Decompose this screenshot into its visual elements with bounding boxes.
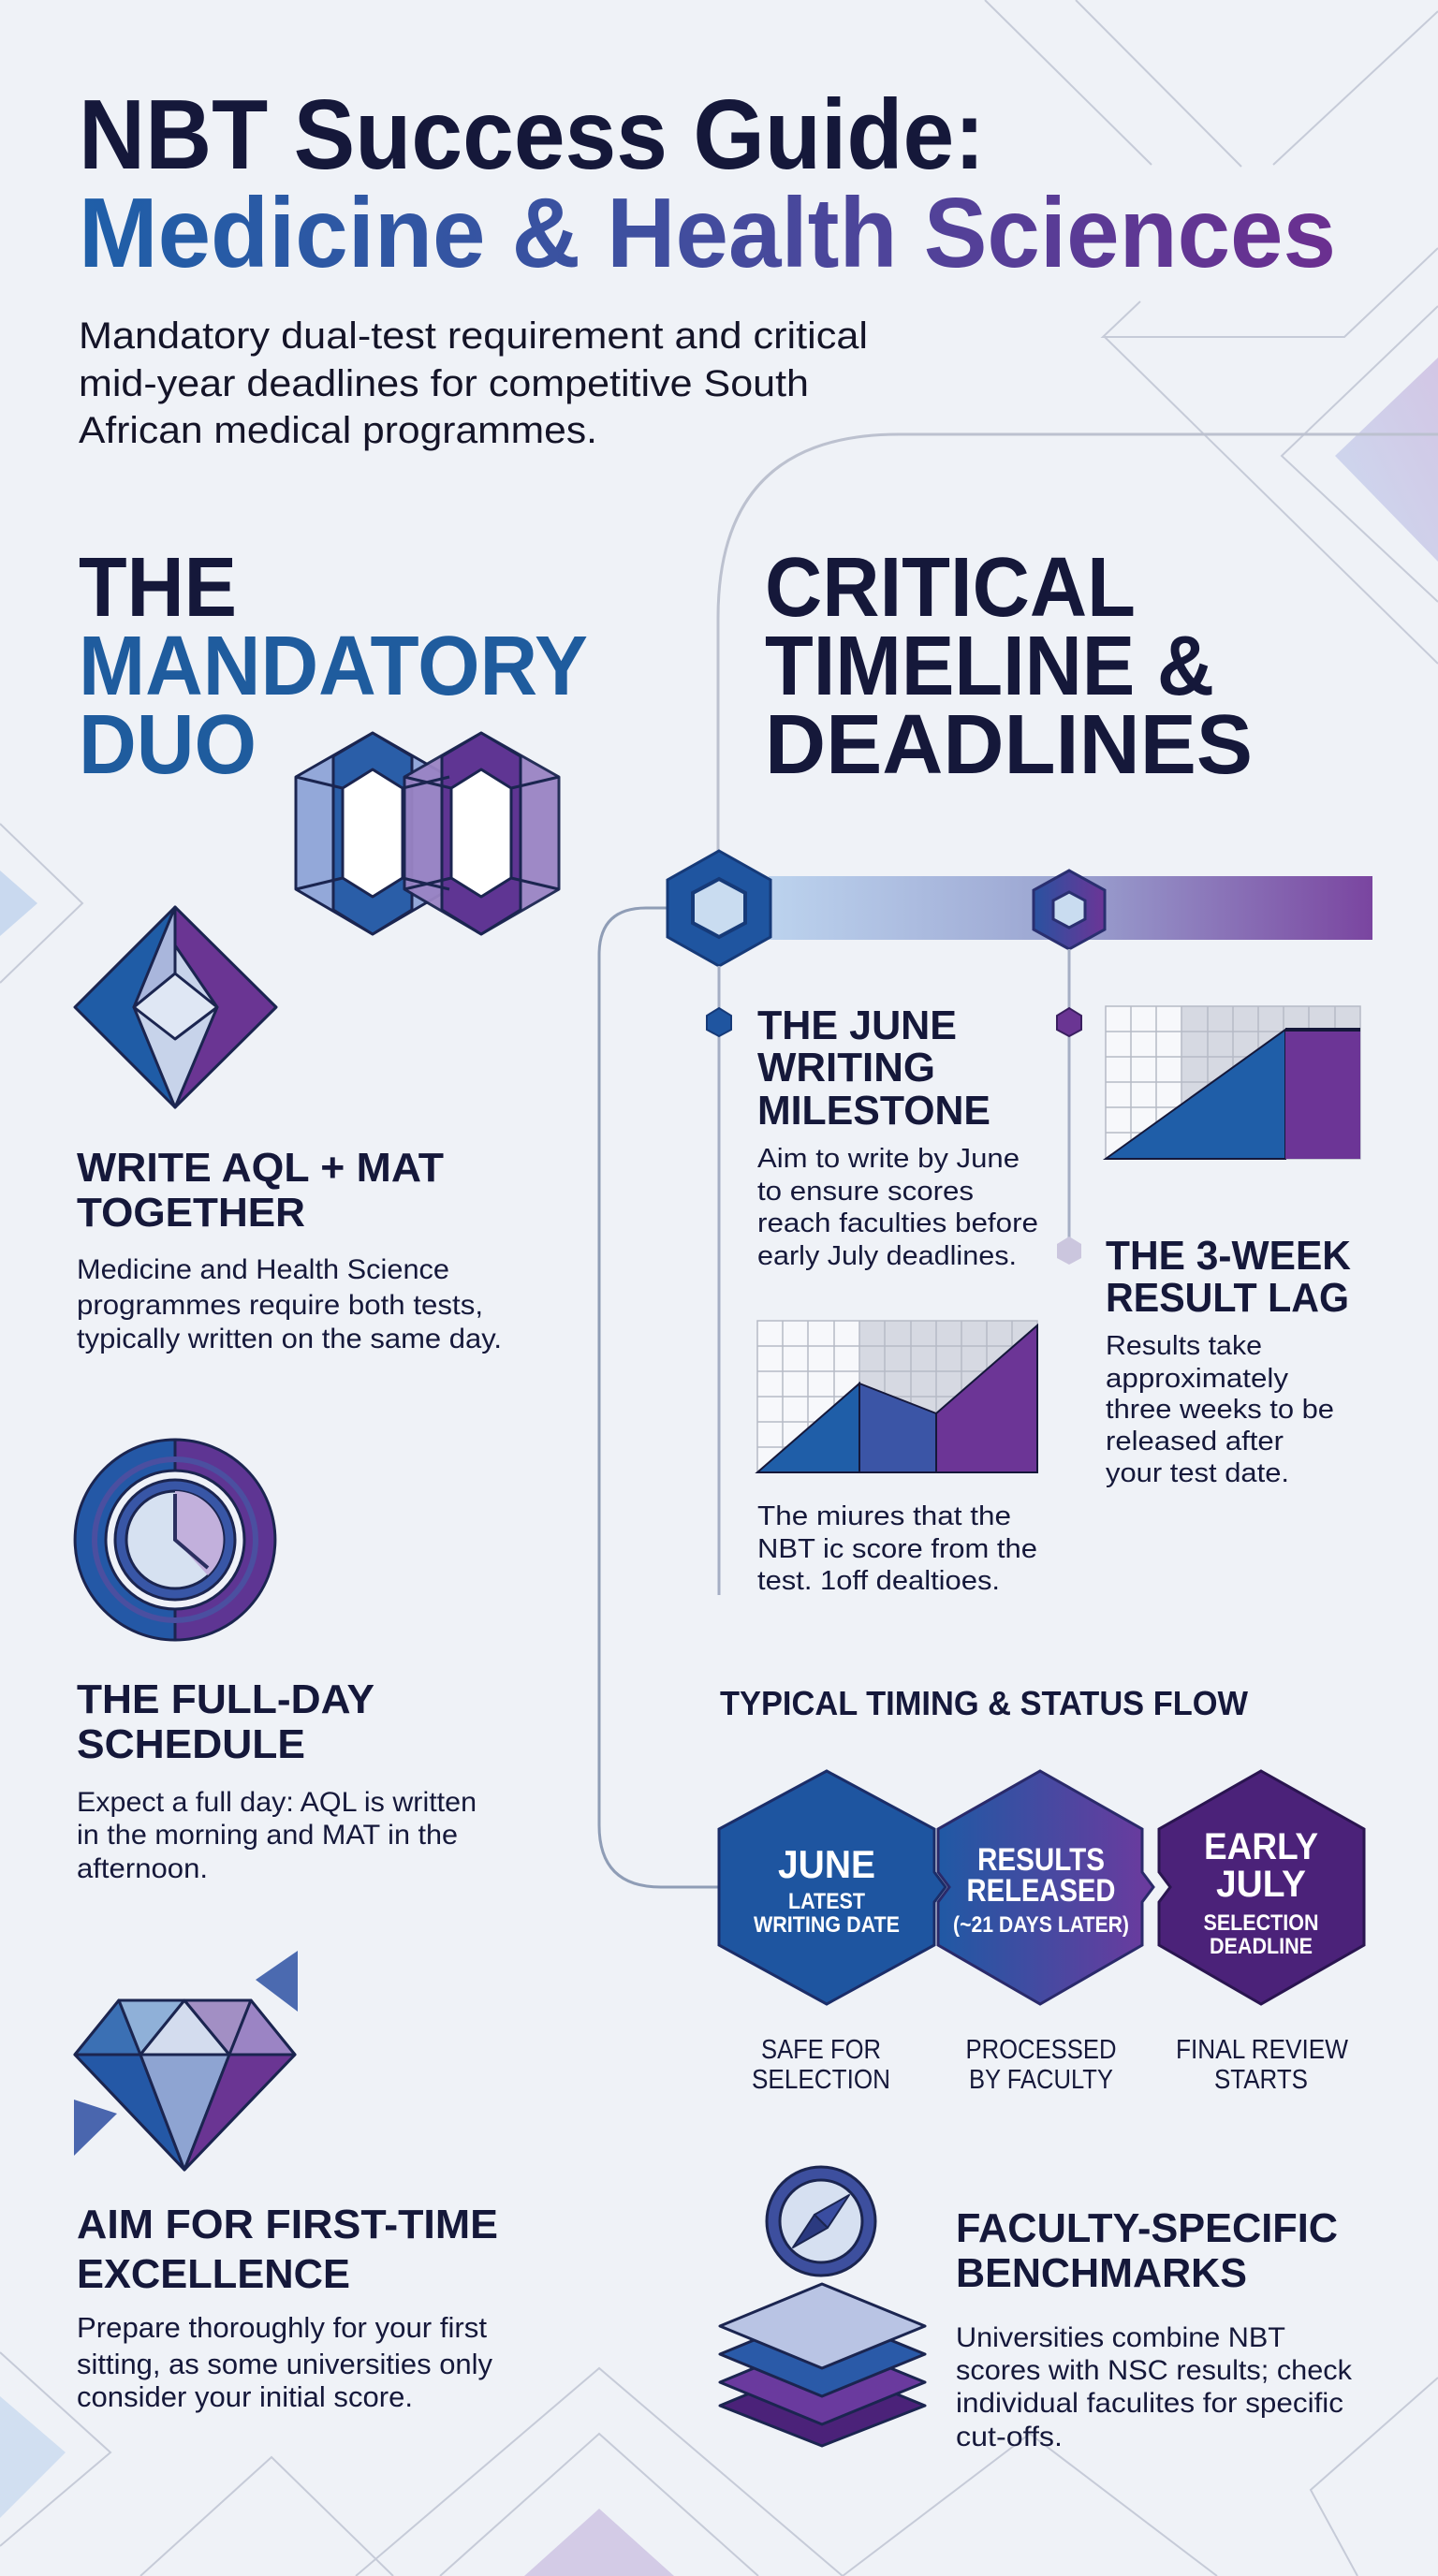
block: 3-week result lag: Results take	[1106, 1331, 1262, 1361]
heading: typical timing & status flow: TYPICAL TIMING & STATUS FLOW	[720, 1684, 1248, 1722]
block: 3-week result lag: released after	[1106, 1427, 1284, 1456]
panel outline: timeline section	[718, 434, 1438, 851]
icon: gem	[75, 2000, 295, 2170]
flow labels: STARTS	[1214, 2065, 1308, 2095]
heading: critical timeline & deadlines	[765, 541, 1253, 792]
block: faculty-specific benchmarks: individual faculites for specific	[956, 2388, 1343, 2419]
block: full-day schedule: afternoon.	[77, 1853, 208, 1884]
text block: chart caption: The miures that the	[757, 1501, 1011, 1531]
block: aim for first-time excellence: Prepare thoroughly for your first	[77, 2311, 487, 2344]
icon: interlocking hexagons duo	[296, 733, 559, 934]
heading: the mandatory duo: DUO	[79, 698, 257, 792]
heading: the mandatory duo: THE	[79, 541, 237, 635]
block: full-day schedule: Expect a full day: AQL is written	[77, 1787, 477, 1818]
block: write aql + mat: TOGETHER	[77, 1190, 305, 1236]
icon: timeline hex results	[1034, 871, 1105, 949]
heading: critical timeline & deadlines: DEADLINES	[765, 698, 1253, 792]
block: june writing milestone: early July deadlines.	[757, 1241, 1017, 1271]
hex: early july	[1159, 1771, 1364, 2004]
block: june writing milestone	[757, 1003, 1038, 1271]
text block: chart caption: NBT ic score from the	[757, 1534, 1037, 1564]
hex: june: LATEST	[788, 1889, 865, 1914]
hex: results released	[938, 1771, 1153, 2004]
block: faculty-specific benchmarks: cut-offs.	[956, 2422, 1063, 2452]
block: june writing milestone: MILESTONE	[757, 1088, 990, 1134]
title: Medicine & Health Sciences	[79, 178, 1336, 288]
flow labels: BY FACULTY	[969, 2065, 1113, 2095]
block: june writing milestone: THE JUNE	[757, 1003, 957, 1048]
timeline bar	[668, 851, 1372, 966]
block: june writing milestone: Aim to write by June	[757, 1144, 1020, 1174]
hex: june	[719, 1771, 946, 2004]
hex: results released: RESULTS	[977, 1842, 1105, 1878]
block: write aql + mat: programmes require both tests,	[77, 1290, 483, 1321]
block: aim for first-time excellence: sitting, as some universities only	[77, 2348, 492, 2380]
hex: june: WRITING DATE	[754, 1912, 900, 1938]
block: 3-week result lag: RESULT LAG	[1106, 1275, 1349, 1321]
block: 3-week result lag: approximately	[1106, 1364, 1289, 1394]
block: aim for first-time excellence: consider your initial score.	[77, 2380, 413, 2413]
text block: chart caption	[757, 1501, 1037, 1596]
heading: the mandatory duo: MANDATORY	[79, 620, 588, 713]
flow labels: SAFE FOR	[761, 2035, 881, 2065]
block: faculty-specific benchmarks: Universities combine NBT	[956, 2322, 1285, 2353]
timeline vertical lines	[717, 966, 721, 1595]
block: faculty-specific benchmarks: scores with NSC results; check	[956, 2355, 1353, 2386]
flow labels: PROCESSED	[966, 2035, 1116, 2065]
block: full-day schedule: SCHEDULE	[77, 1721, 305, 1767]
hex: results released: (~21 DAYS LATER)	[953, 1912, 1129, 1938]
hex: june: JUNE	[778, 1842, 875, 1886]
text block: chart caption: test. 1off dealtioes.	[757, 1566, 1000, 1596]
block: aim for first-time excellence: EXCELLENCE	[77, 2251, 350, 2297]
block: write aql + mat: typically written on the same day.	[77, 1324, 502, 1354]
block: full-day schedule	[77, 1676, 477, 1884]
block: faculty-specific benchmarks	[956, 2205, 1353, 2452]
block: full-day schedule: in the morning and MAT in the	[77, 1820, 458, 1851]
icon: compass over stacked layers	[720, 2167, 925, 2446]
heading: the mandatory duo	[79, 541, 588, 792]
hex: early july: SELECTION	[1204, 1910, 1318, 1936]
block: 3-week result lag	[1106, 1233, 1351, 1488]
title: NBT Success Guide:	[79, 80, 985, 190]
icon: diamond split	[75, 907, 276, 1107]
chart: area chart bottom-left	[757, 1321, 1037, 1472]
hex: early july: JULY	[1216, 1864, 1306, 1905]
flow labels: SELECTION	[752, 2065, 890, 2095]
block: write aql + mat: WRITE AQL + MAT	[77, 1145, 444, 1191]
block: aim for first-time excellence: AIM FOR FIRST-TIME	[77, 2202, 498, 2247]
block: 3-week result lag: THE 3-WEEK	[1106, 1233, 1351, 1279]
hex: results released: RELEASED	[966, 1873, 1116, 1909]
block: june writing milestone: to ensure scores	[757, 1177, 974, 1207]
subtitle: mid-year deadlines for competitive South	[79, 363, 809, 404]
flow labels: FINAL REVIEW	[1176, 2035, 1349, 2065]
hex: early july: EARLY	[1204, 1826, 1318, 1867]
connector line: left curve to flow	[599, 908, 719, 1887]
block: write aql + mat: Medicine and Health Science	[77, 1254, 449, 1285]
flow: status hexagons	[719, 1771, 1364, 2004]
heading: critical timeline & deadlines: CRITICAL	[765, 541, 1136, 635]
chart: step chart top-right	[1106, 1006, 1360, 1159]
block: aim for first-time excellence	[77, 2202, 498, 2413]
subtitle: African medical programmes.	[79, 410, 597, 451]
block: june writing milestone: reach faculties before	[757, 1208, 1038, 1238]
title	[79, 80, 1336, 288]
subtitle	[79, 315, 868, 451]
block: full-day schedule: THE FULL-DAY	[77, 1676, 374, 1722]
flow labels	[752, 2035, 1349, 2095]
heading: critical timeline & deadlines: TIMELINE &	[765, 620, 1214, 713]
block: 3-week result lag: three weeks to be	[1106, 1395, 1334, 1425]
block: june writing milestone: WRITING	[757, 1045, 935, 1090]
hex: early july: DEADLINE	[1210, 1934, 1313, 1959]
block: write aql + mat	[77, 1145, 502, 1354]
block: 3-week result lag: your test date.	[1106, 1458, 1289, 1488]
block: faculty-specific benchmarks: BENCHMARKS	[956, 2250, 1247, 2296]
block: faculty-specific benchmarks: FACULTY-SPECIFIC	[956, 2205, 1338, 2251]
icon: clock	[75, 1440, 275, 1640]
subtitle: Mandatory dual-test requirement and critical	[79, 315, 868, 357]
icon: timeline hex june	[668, 851, 770, 966]
